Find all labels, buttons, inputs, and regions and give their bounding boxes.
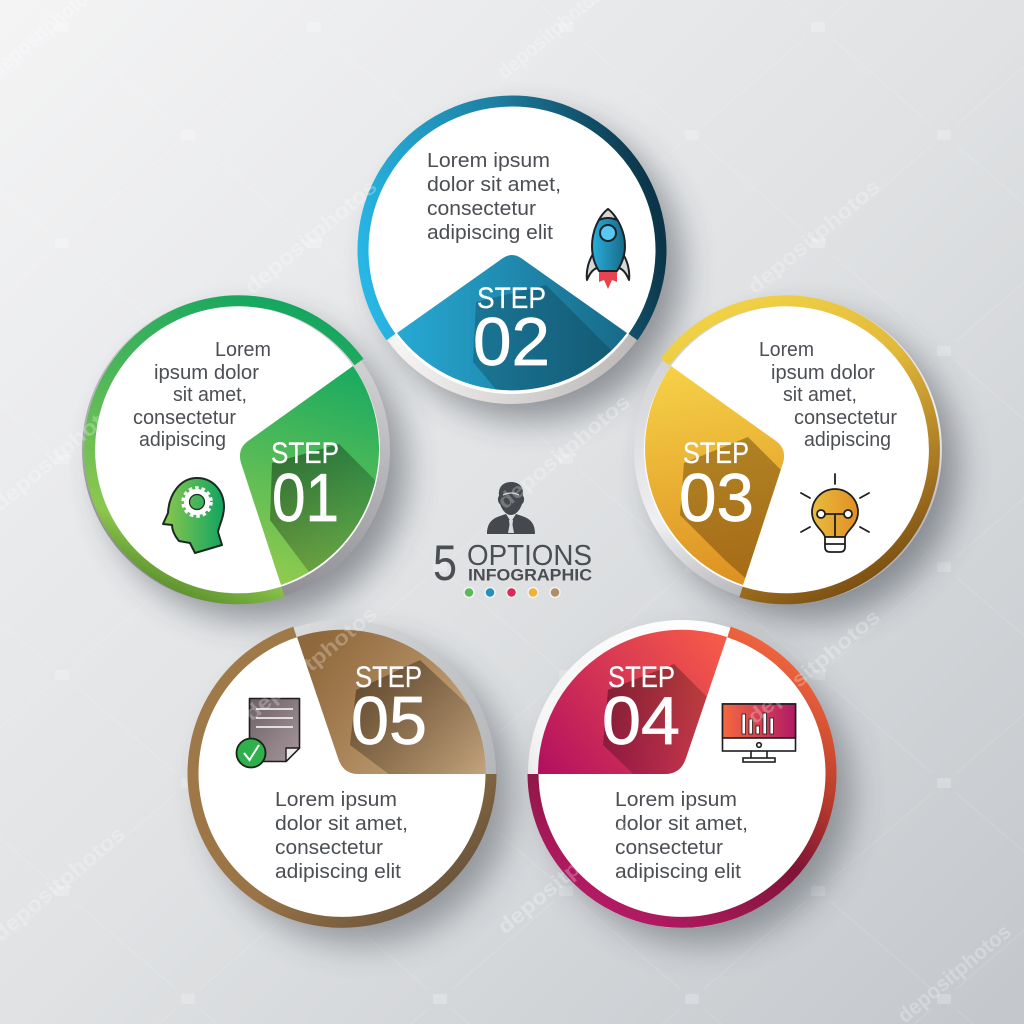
text 03: adipiscing: [804, 429, 891, 451]
wedge 04: [538, 630, 727, 774]
text 04: Lorem ipsum: [615, 789, 737, 811]
text 01: adipiscing: [139, 429, 226, 451]
step label 04: STEP: [608, 661, 675, 694]
text 01: ipsum dolor: [154, 362, 259, 384]
text 04: adipiscing elit: [615, 861, 741, 883]
number 04: 04: [602, 683, 680, 759]
center emblem: [433, 482, 592, 598]
text 02: adipiscing elit: [427, 222, 553, 244]
text 03: [759, 339, 897, 451]
text 02: [427, 150, 561, 244]
icon: businessman: [487, 482, 535, 534]
ring 03: [665, 301, 934, 599]
text 04: dolor sit amet,: [615, 813, 748, 835]
wedge 03: [645, 366, 784, 585]
text 01: Lorem: [215, 339, 271, 361]
long shadow 04: [603, 664, 707, 774]
icon: document with check: [236, 698, 300, 768]
long shadow 01: [270, 444, 376, 572]
text 01: sit amet,: [173, 384, 247, 406]
text 04: [615, 789, 748, 883]
icon: monitor with chart: [722, 704, 796, 762]
ring 02: [363, 101, 661, 337]
text 03: sit amet,: [783, 384, 857, 406]
ring 05: [193, 632, 491, 922]
icon: head with gear: [163, 478, 224, 553]
ring 04: [533, 632, 831, 922]
watermarks: depositphotos: [743, 605, 885, 729]
text 05: adipiscing elit: [275, 861, 401, 883]
text 03: ipsum dolor: [771, 362, 875, 384]
circle step 02: [358, 96, 682, 430]
wedge 05: [297, 630, 486, 774]
number 03: 03: [679, 460, 754, 536]
title options: OPTIONS: [467, 540, 592, 572]
watermarks: depositphotos: [240, 175, 382, 299]
text 05: consectetur: [275, 837, 383, 859]
icon: rocket: [587, 209, 629, 289]
step label 03: STEP: [683, 437, 749, 470]
long shadow 03: [680, 437, 781, 578]
text 05: Lorem ipsum: [275, 789, 397, 811]
text 05: dolor sit amet,: [275, 813, 408, 835]
ring 01: [90, 301, 359, 599]
step label 02: STEP: [477, 282, 546, 315]
text 02: Lorem ipsum: [427, 150, 550, 172]
circle step 03: [634, 296, 958, 620]
text 05: [275, 789, 408, 883]
text 03: consectetur: [794, 407, 897, 429]
long shadow 05: [350, 660, 486, 774]
text 01: [133, 339, 271, 451]
numeral 5: 5: [433, 535, 457, 591]
number 01: 01: [272, 460, 339, 536]
text 03: Lorem: [759, 339, 814, 361]
icon: light bulb: [801, 474, 869, 552]
text 02: consectetur: [427, 198, 536, 220]
number 05: 05: [351, 683, 427, 759]
circle step 01: [82, 296, 410, 620]
text 01: consectetur: [133, 407, 236, 429]
number 02: 02: [473, 304, 550, 380]
circle step 05: [188, 620, 512, 944]
circle step 04: [528, 620, 852, 944]
watermarks: depositphotos: [743, 175, 885, 299]
wedge 01: [240, 366, 379, 585]
text 02: dolor sit amet,: [427, 174, 561, 196]
long shadow 02: [473, 285, 612, 390]
watermarks: depositphotos: [493, 815, 635, 939]
watermarks: depositphotos: [240, 602, 382, 726]
watermarks: depositphotos: [493, 390, 635, 514]
legend dots: [464, 588, 560, 598]
text 04: consectetur: [615, 837, 723, 859]
step label 01: STEP: [271, 437, 339, 470]
step label 05: STEP: [355, 661, 422, 694]
subtitle infographic: INFOGRAPHIC: [468, 566, 592, 584]
wedge 02: [397, 255, 627, 390]
